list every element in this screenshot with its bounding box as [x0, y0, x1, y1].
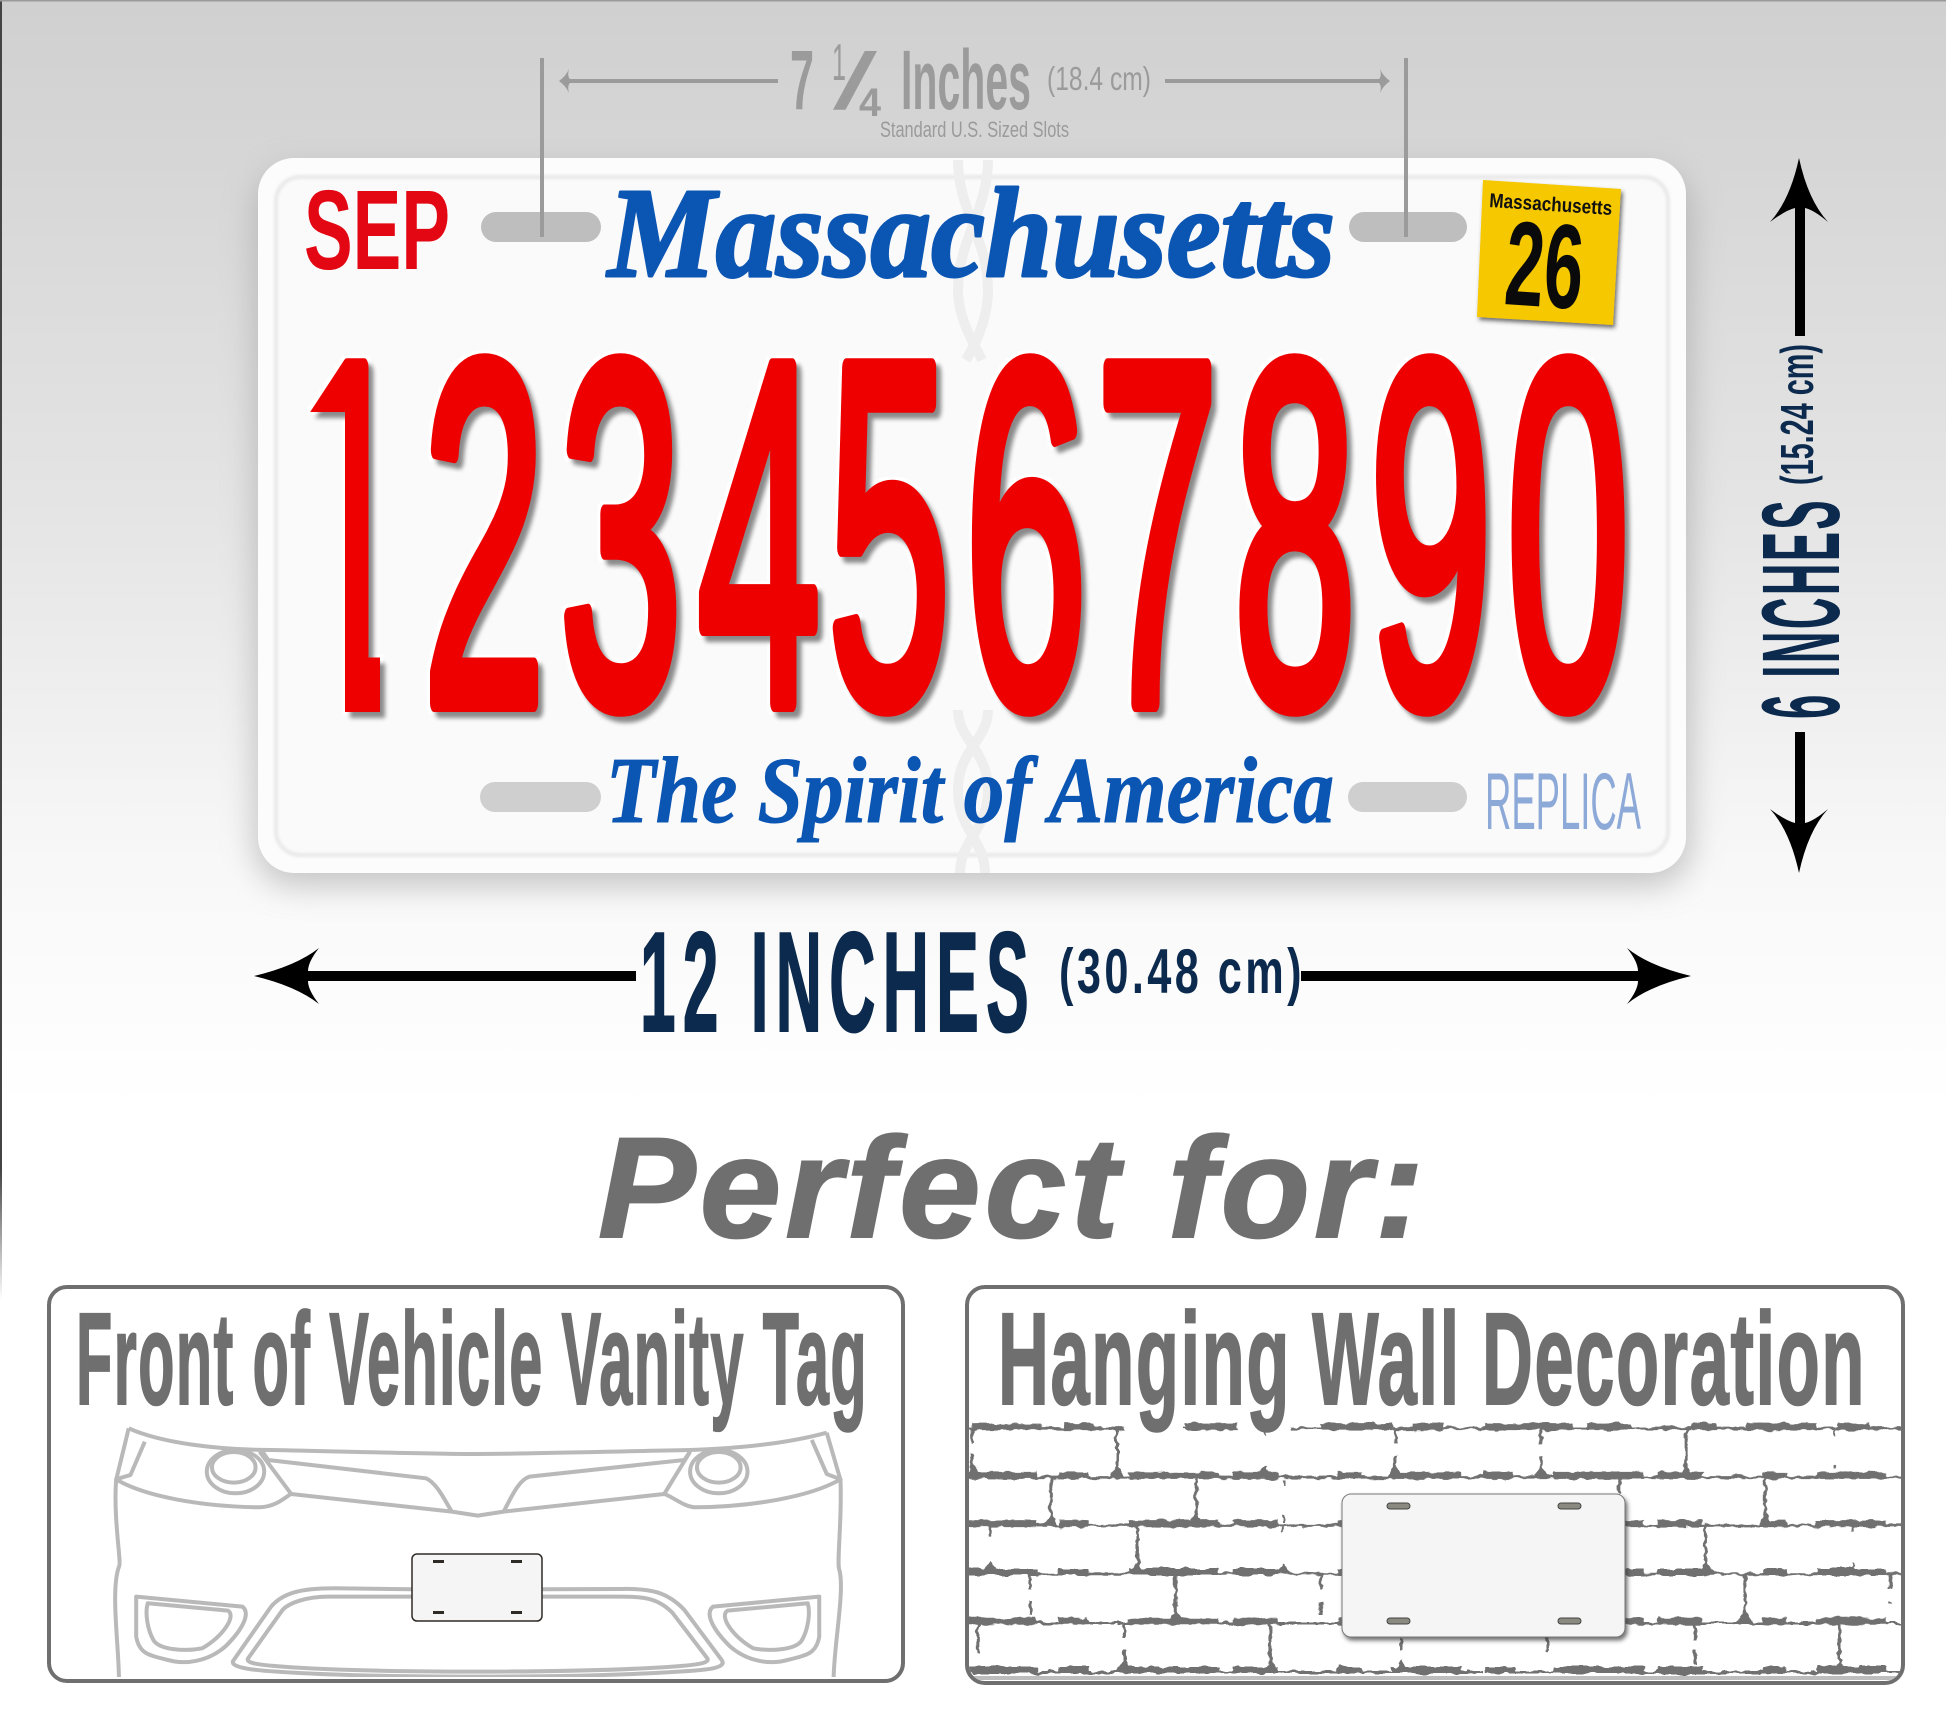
car front outline: [115, 1428, 841, 1680]
15.24 cm label: (15.24 cm): [1771, 344, 1823, 485]
panel frame: [49, 1287, 903, 1681]
left extension line: [540, 58, 544, 237]
left grey arrow: [559, 69, 778, 93]
bottom arrow: [1770, 732, 1828, 873]
sticker year: 26: [1501, 196, 1588, 335]
top arrow: [1770, 158, 1828, 336]
license plate: [258, 158, 1686, 873]
slot spacing dimension: [540, 33, 1408, 237]
embossed inner border: [276, 177, 1668, 855]
slot spacing dimension: Inches: [901, 33, 1031, 127]
metric label: (18.4 cm): [1047, 60, 1151, 97]
license plate: REPLICA: [1485, 757, 1641, 847]
plate number: 234567890: [423, 262, 1629, 807]
state name: Massachusetts: [606, 162, 1335, 304]
fraction denominator: 4: [859, 81, 882, 125]
background twist graphic: [958, 160, 988, 873]
left arrow: [254, 948, 636, 1004]
text: Front of Vehicle Vanity Tag: [76, 1285, 868, 1432]
panel: hanging wall decoration: [965, 1285, 1903, 1683]
plate number: [310, 353, 1632, 726]
month SEP: SEP: [304, 167, 450, 293]
plate number: 1: [290, 262, 412, 807]
fraction slash: /: [833, 37, 879, 126]
height dimension: 6 INCHES: [1740, 498, 1863, 719]
registration sticker: [1477, 180, 1621, 335]
slots caption: Standard U.S. Sized Slots: [880, 117, 1069, 142]
mounting slot top right: [1349, 212, 1467, 242]
heading: Perfect for:: [598, 1109, 1428, 1268]
width dimension: [254, 903, 1691, 1062]
sticker state name: Massachusetts: [1489, 190, 1613, 220]
right arrow: [1301, 948, 1691, 1004]
slot spacing dimension: 1: [832, 34, 846, 92]
panel frame: [967, 1287, 1903, 1683]
wall blank plate: [1342, 1494, 1625, 1637]
slogan: The Spirit of America: [606, 739, 1334, 843]
plate drop shadow: [255, 170, 1691, 886]
panel: front of vehicle: [49, 1285, 903, 1681]
mini blank plate: [412, 1554, 542, 1621]
mounting slot top left: [481, 212, 601, 242]
right grey arrow: [1165, 69, 1390, 93]
right extension line: [1404, 58, 1408, 237]
brick wall: [965, 1427, 1903, 1680]
mounting slot bottom right: [1348, 782, 1467, 812]
width dimension: 12 INCHES: [640, 903, 1036, 1062]
seven: 7: [790, 33, 814, 127]
30.48 cm label: (30.48 cm): [1059, 937, 1305, 1007]
plate body: [258, 158, 1686, 873]
mounting slot bottom left: [480, 782, 601, 812]
